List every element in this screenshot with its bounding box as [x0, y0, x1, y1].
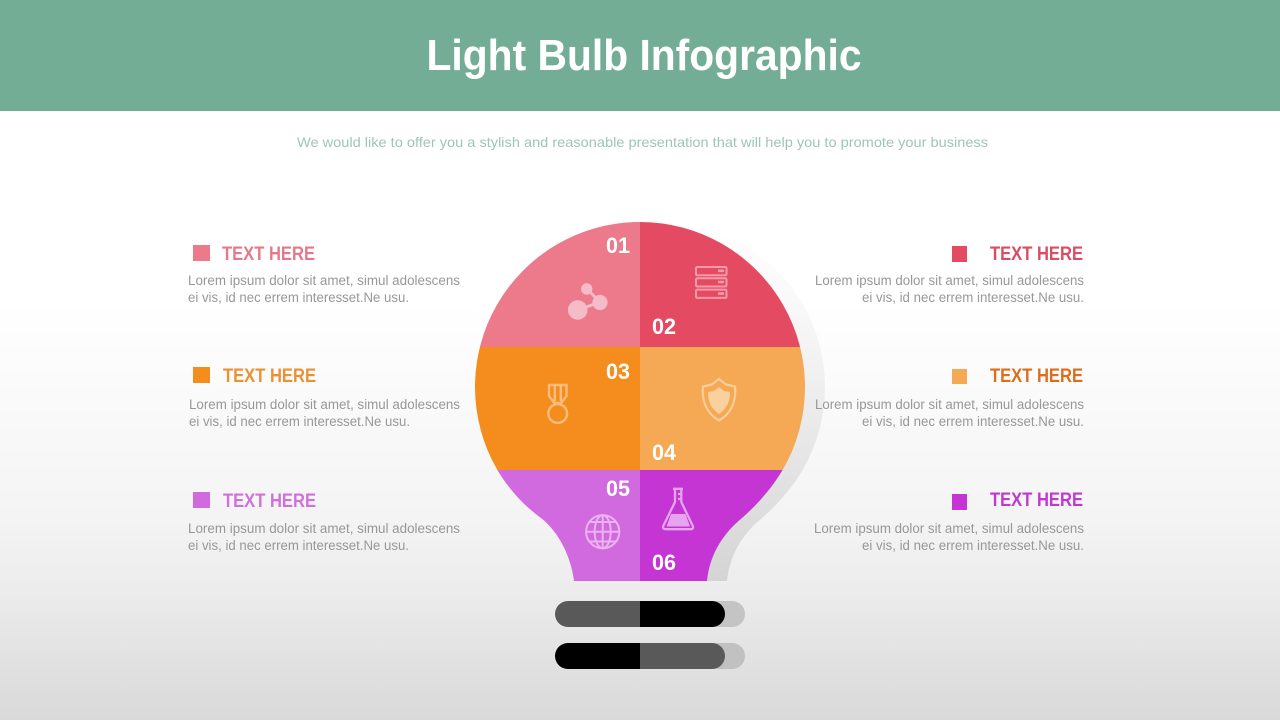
segment 05 — [498, 470, 640, 581]
item 03 text block: Lorem ipsum dolor sit amet, simul adolescens — [189, 397, 460, 412]
segment 04 — [640, 347, 810, 470]
item 03 text block — [189, 366, 460, 429]
bulb base: top bar — [555, 601, 745, 627]
item 05 text block — [188, 491, 460, 553]
item 02 text block: TEXT HERE — [990, 244, 1083, 265]
icon: flask — [663, 489, 693, 529]
item 01 text block: TEXT HERE — [222, 244, 315, 265]
item 03 text block: TEXT HERE — [223, 366, 316, 387]
bulb shadow — [495, 222, 825, 581]
item 06 text block: TEXT HERE — [990, 490, 1083, 511]
item 04 text block: TEXT HERE — [990, 366, 1083, 387]
icon: shield — [703, 379, 735, 420]
item 02 text block — [815, 244, 1084, 305]
icon: globe — [586, 515, 620, 548]
item 04 text block — [815, 366, 1084, 429]
item 05 text block: ei vis, id nec errem interesset.Ne usu. — [188, 538, 409, 553]
number 04: 04 — [652, 440, 677, 465]
number 05: 05 — [606, 476, 630, 501]
bulb base: bottom bar — [555, 643, 745, 669]
item 06 text block — [814, 490, 1084, 553]
item 05 text block: TEXT HERE — [223, 491, 316, 512]
light bulb segments — [470, 215, 810, 585]
item 02 text block: Lorem ipsum dolor sit amet, simul adolescens — [815, 273, 1084, 288]
item 01 text block: Lorem ipsum dolor sit amet, simul adolescens — [188, 273, 460, 288]
segment 02 — [640, 222, 800, 347]
item 04 text block: ei vis, id nec errem interesset.Ne usu. — [862, 414, 1084, 429]
segment 06 — [640, 470, 782, 581]
subtitle: We would like to offer you a stylish and reasonable presentation that will help you to promote your business — [297, 134, 988, 150]
item 02 text block: ei vis, id nec errem interesset.Ne usu. — [862, 290, 1084, 305]
item 06 text block: Lorem ipsum dolor sit amet, simul adolescens — [814, 521, 1084, 536]
item 03 text block: ei vis, id nec errem interesset.Ne usu. — [189, 414, 410, 429]
item 01 text block: ei vis, id nec errem interesset.Ne usu. — [188, 290, 409, 305]
item 05 text block: Lorem ipsum dolor sit amet, simul adolescens — [188, 521, 460, 536]
icon: medal — [548, 385, 567, 423]
item 01 text block — [188, 244, 460, 305]
number 03: 03 — [606, 359, 630, 384]
header band — [0, 0, 1280, 111]
segment 01 — [480, 222, 640, 347]
title: Light Bulb Infographic — [426, 31, 862, 80]
item 04 text block: Lorem ipsum dolor sit amet, simul adolescens — [815, 397, 1084, 412]
icon: server stack — [696, 267, 726, 298]
icon: molecule — [568, 283, 608, 320]
segment 03 — [470, 347, 640, 470]
number 06: 06 — [652, 550, 676, 575]
item 06 text block: ei vis, id nec errem interesset.Ne usu. — [862, 538, 1084, 553]
number 02: 02 — [652, 314, 676, 339]
number 01: 01 — [606, 233, 630, 258]
